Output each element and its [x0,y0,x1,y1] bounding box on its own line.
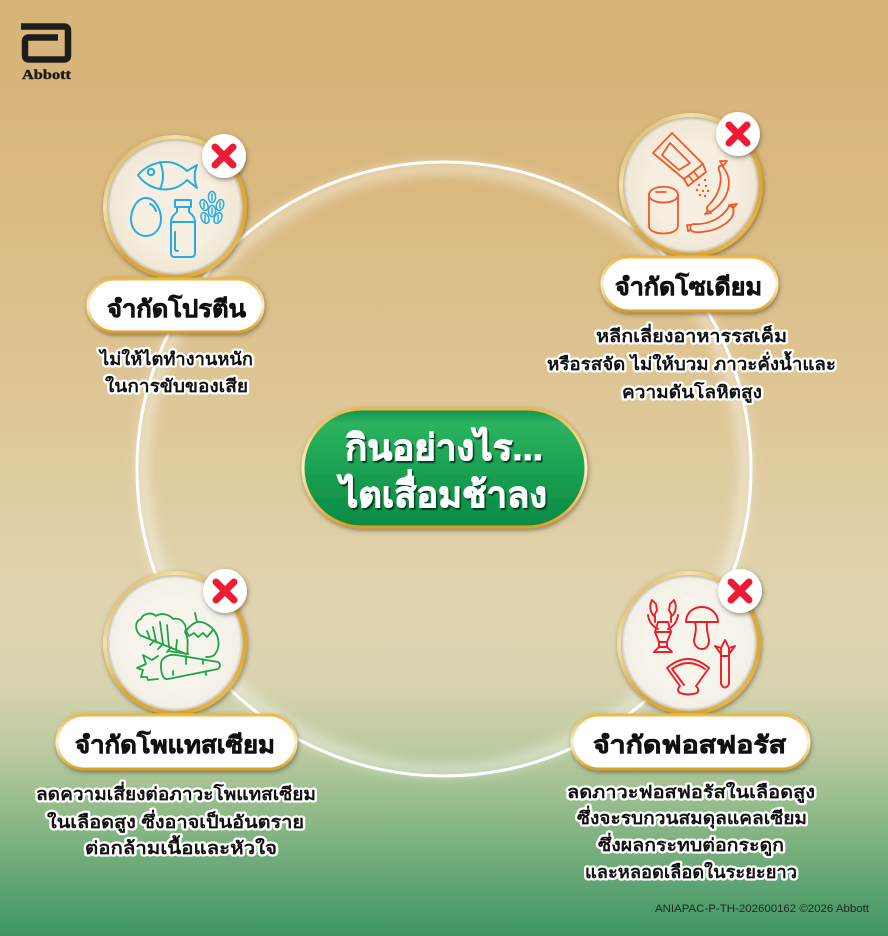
icon: red cross badge [716,112,760,156]
text: phosphorus description [567,781,815,882]
text: potassium description: ลดความเสี่ยงต่อภาวะโพแทสเซียม [36,781,316,804]
panel: phosphorus [567,569,815,882]
panel: centre title [303,409,586,527]
text: potassium description: ในเลือดสูง ซึ่งอาจเป็นอันตราย [47,809,304,834]
Abbott logo [21,26,72,82]
panel: sodium [547,112,836,404]
icon: Abbott mark [21,26,68,60]
icon: red cross badge [718,569,762,613]
heading: how to eat: กินอย่างไร... [345,426,543,468]
text: phosphorus description: ซึ่งจะรบกวนสมดุลแคลเซียม [577,805,807,829]
text: protein description [98,348,253,396]
heading: limit potassium [57,715,296,769]
panel: potassium [36,569,316,858]
text: sodium description: หลีกเลี่ยงอาหารรสเค็ม [596,323,787,346]
text: protein description: ไม่ให้ไตทำงานหนัก [98,348,253,369]
heading: limit phosphorus [572,715,809,769]
text: sodium description: หรือรสจัด ไม่ให้บวม ภาวะคั่งน้ำและ [547,351,836,374]
footer reference code: ANIAPAC-P-TH-202600162 ©2026 Abbott [655,903,869,915]
text: phosphorus description: และหลอดเลือดในระยะยาว [585,861,797,882]
icon: red cross badge [203,569,247,613]
heading: limit sodium [602,257,777,311]
text: phosphorus description: ลดภาวะฟอสฟอรัสในเลือดสูง [567,781,815,804]
heading: limit potassium: จำกัดโพแทสเซียม [75,730,275,759]
text: phosphorus description: ซึ่งผลกระทบต่อกระดูก [598,832,784,857]
heading: limit protein: จำกัดโปรตีน [107,294,247,323]
text: potassium description [36,781,316,858]
logo wordmark: Abbott [22,67,72,82]
icon: red cross badge [202,134,246,178]
heading: how to eat: ไตเสื่อมช้าลง [336,469,547,515]
icon: seafood and mushrooms [619,573,759,713]
heading: limit protein [88,279,263,332]
heading: limit sodium: จำกัดโซเดียม [615,272,762,301]
icon: protein foods [105,137,245,277]
icon: salty foods [621,115,761,255]
text: sodium description: ความดันโลหิตสูง [622,381,762,404]
heading: limit phosphorus: จำกัดฟอสฟอรัส [593,732,786,759]
panel: protein [88,134,263,396]
white ring connecting panels [137,162,751,776]
text: protein description: ในการขับของเสีย [105,375,248,396]
heading: how to eat [336,426,547,515]
text: potassium description: ต่อกล้ามเนื้อและหัวใจ [85,835,277,858]
icon: vegetables [105,573,245,713]
text: sodium description [547,323,836,404]
